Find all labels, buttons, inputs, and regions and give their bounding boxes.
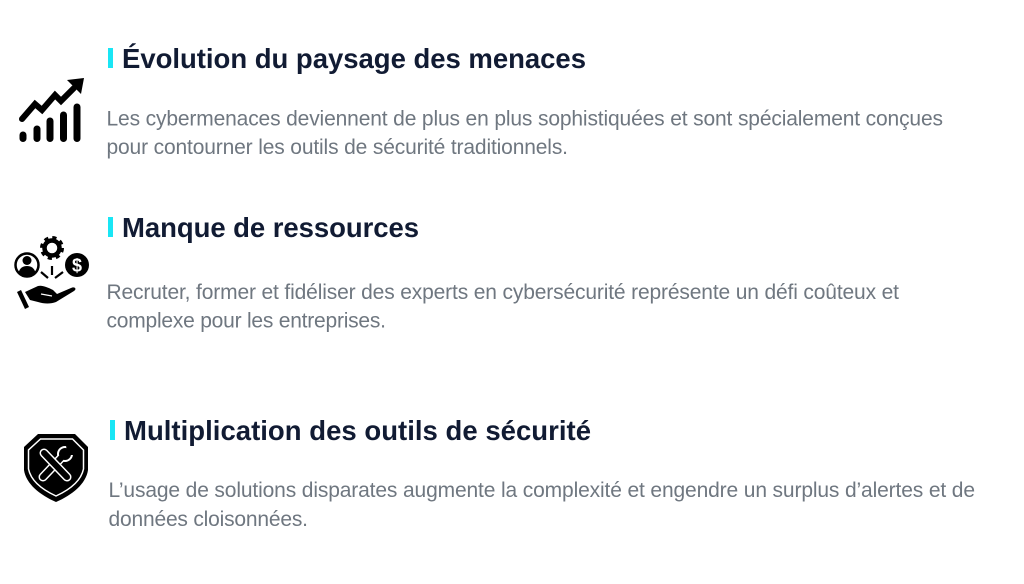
text block: Recruter, former et fidéliser des experts en cybersécurité représente un défi coûteux et (106, 281, 899, 304)
icon: hand with gear, person and dollar: $ (72, 256, 82, 276)
text block: pour contourner les outils de sécurité traditionnels. (106, 136, 568, 159)
panel: multiplication des outils de sécurité (24, 415, 975, 531)
icon: rising chart with arrow (22, 78, 84, 138)
text block: données cloisonnées. (108, 508, 308, 531)
text block (106, 281, 899, 332)
panel: manque de ressources (16, 212, 899, 332)
accent bar (108, 217, 113, 237)
panel: évolution du paysage des menaces (22, 43, 943, 159)
text block: complexe pour les entreprises. (106, 310, 386, 332)
accent bar (108, 48, 113, 68)
text block (106, 108, 943, 159)
icon: shield with crossed tools (24, 434, 88, 502)
text block: Les cybermenaces deviennent de plus en plus sophistiquées et sont spécialement conçues (106, 108, 943, 130)
accent bar (110, 420, 115, 440)
icon: hand with gear, person and dollar (16, 238, 89, 309)
heading: Manque de ressources (122, 212, 419, 243)
text block: L’usage de solutions disparates augmente la complexité et engendre un surplus d’alertes et de (108, 479, 975, 502)
heading: Multiplication des outils de sécurité (124, 415, 591, 446)
text block (108, 479, 975, 531)
heading: Évolution du paysage des menaces (122, 43, 586, 74)
